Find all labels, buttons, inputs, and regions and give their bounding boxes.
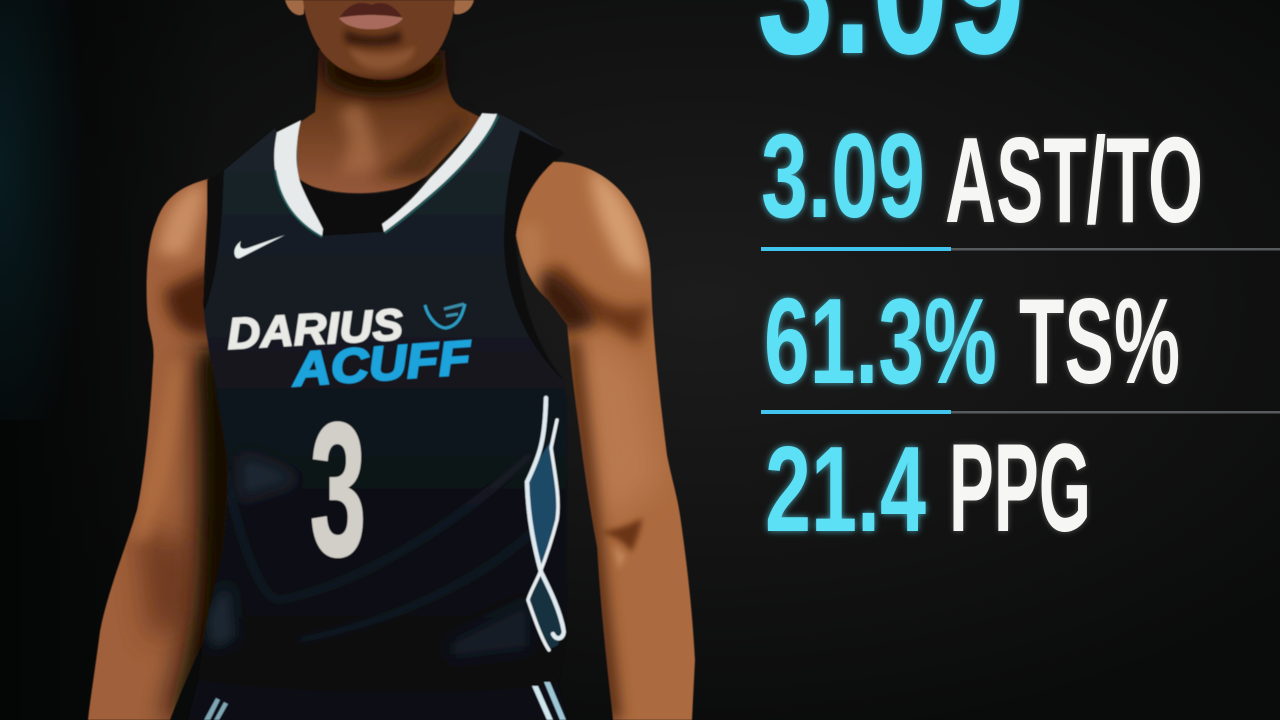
- chin highlight: [350, 46, 415, 70]
- swoosh icon: [234, 235, 285, 258]
- face chin: [303, 0, 455, 80]
- jersey body: [190, 105, 575, 700]
- jersey number: 3: [310, 384, 366, 596]
- fabric folds: [225, 455, 535, 640]
- left arm: [87, 178, 228, 720]
- right arm: [510, 155, 700, 720]
- stat: true shooting: 61.3%: [764, 273, 997, 409]
- neck and chest: [296, 50, 482, 193]
- ears: [285, 0, 474, 15]
- jersey logo icon: [425, 304, 465, 328]
- armhole bands: [202, 170, 224, 310]
- jersey name: DARIUS: [226, 300, 404, 359]
- stat: points per game: 21.4: [765, 421, 926, 557]
- neck highlights and shadows: [325, 55, 470, 178]
- stat: assist to turnover: 3.09: [761, 109, 925, 243]
- blue side panel: [529, 442, 556, 564]
- shorts: [188, 680, 568, 720]
- lips: [339, 3, 403, 29]
- jersey name: [226, 300, 474, 397]
- divider bar 1: [761, 247, 1280, 251]
- player figure: [80, 0, 700, 720]
- stat: true shooting: TS%: [1019, 273, 1180, 409]
- undershirt: [298, 175, 428, 238]
- chin shadow: [345, 30, 402, 46]
- collar: [274, 113, 498, 237]
- stat: points per game: PPG: [949, 419, 1091, 558]
- stat: assist to turnover: [761, 109, 1203, 248]
- jersey stripes: [527, 398, 564, 650]
- jersey name: ACUFF: [290, 332, 474, 397]
- divider bar 2: [761, 410, 1280, 414]
